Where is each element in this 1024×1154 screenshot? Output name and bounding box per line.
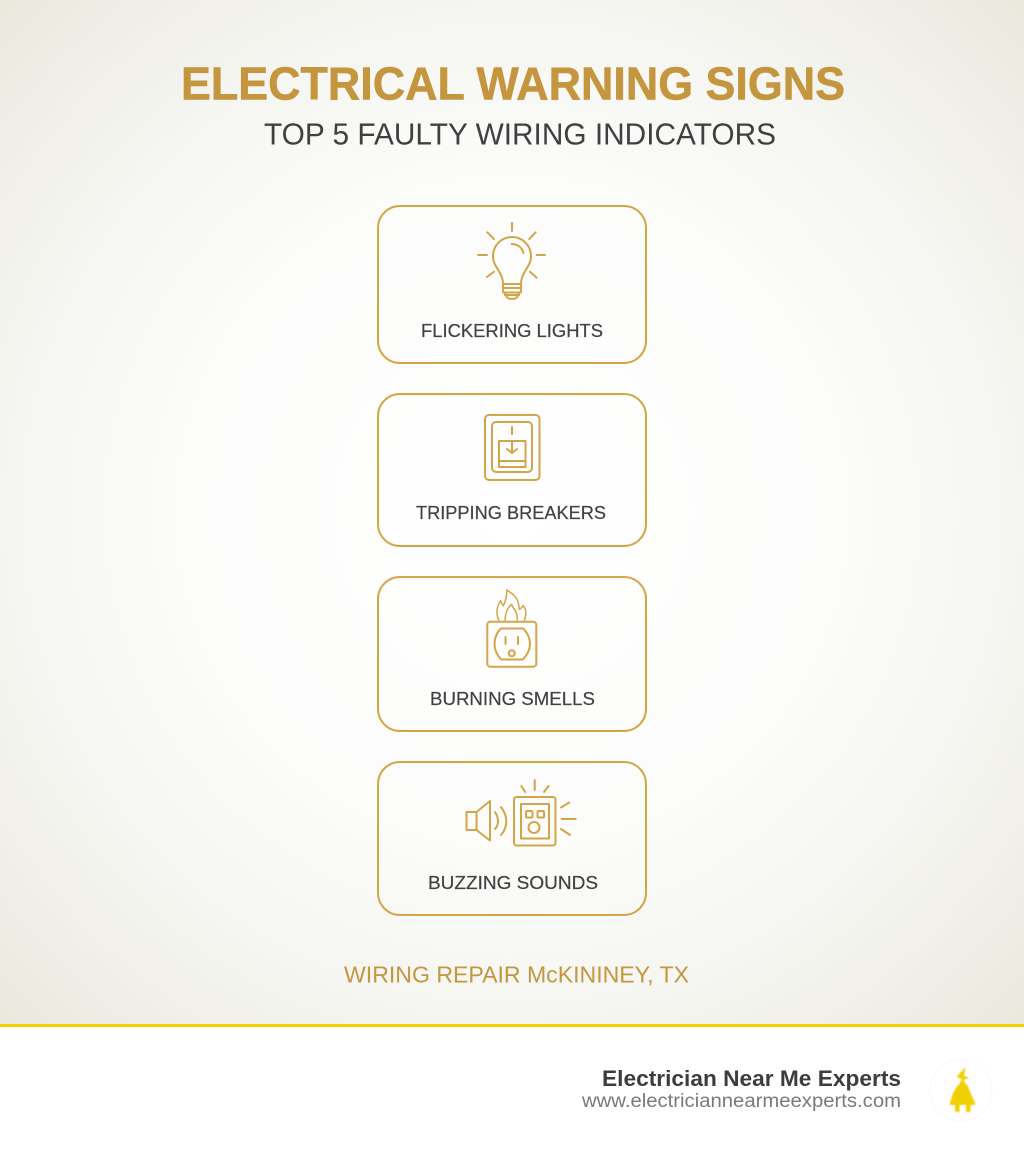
icon: lightning plug logo: [930, 1059, 992, 1121]
footer background: [0, 1027, 1024, 1154]
card border: [378, 394, 646, 546]
panel: tripping breakers: [378, 394, 646, 546]
label: BUZZING SOUNDS: [428, 873, 598, 893]
panel: buzzing sounds: [378, 762, 646, 915]
panel: flickering lights: [378, 206, 646, 363]
company name: Electrician Near Me Experts: [602, 1066, 901, 1091]
icon: breaker switch: [485, 415, 540, 480]
icon: burning outlet: [487, 590, 536, 667]
card border: [378, 762, 646, 915]
card border: [378, 577, 646, 731]
yellow rule: [0, 1024, 1024, 1027]
icon: buzzing speaker and outlet: [466, 780, 576, 846]
subtitle: TOP 5 FAULTY WIRING INDICATORS: [264, 116, 776, 152]
label: TRIPPING BREAKERS: [416, 503, 606, 523]
logo circle: [930, 1059, 992, 1121]
plug and bolt: [950, 1067, 975, 1112]
footer panel: [0, 1024, 1024, 1154]
label: FLICKERING LIGHTS: [421, 321, 603, 341]
label: BURNING SMELLS: [430, 689, 595, 709]
website: www.electriciannearmeexperts.com: [581, 1091, 901, 1112]
location caption: WIRING REPAIR McKININEY, TX: [344, 962, 689, 988]
card border: [378, 206, 646, 363]
icon: light bulb: [478, 223, 545, 299]
panel: burning smells: [378, 577, 646, 731]
title: ELECTRICAL WARNING SIGNS: [181, 58, 845, 110]
